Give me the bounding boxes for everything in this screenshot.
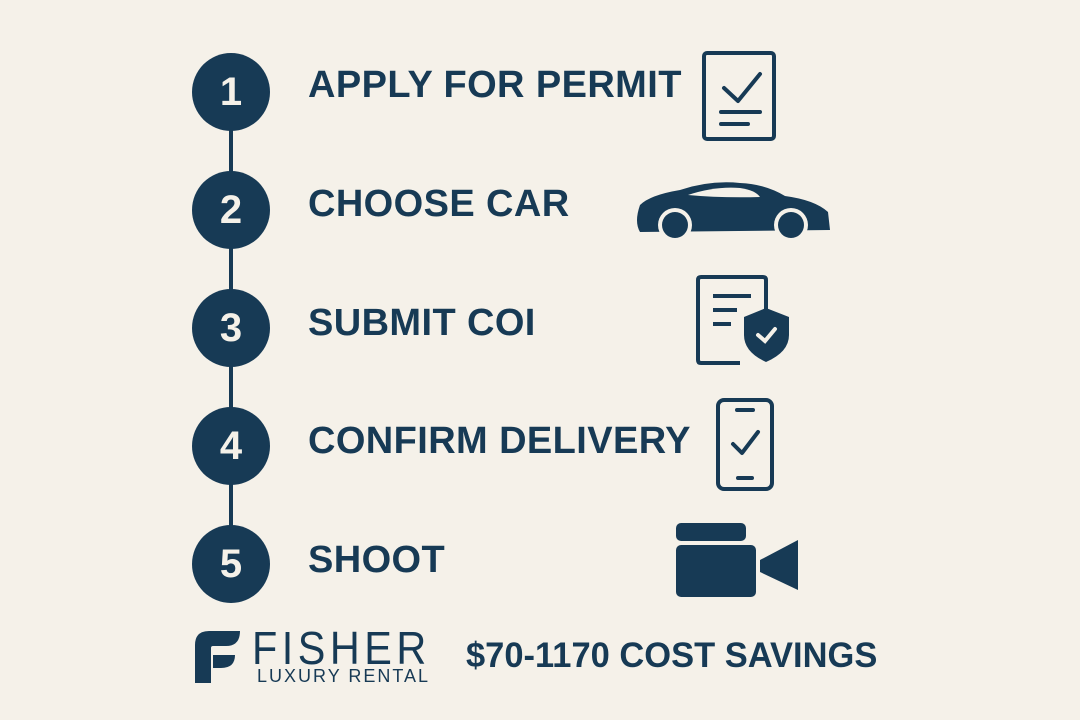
timeline line — [229, 92, 233, 564]
step 3 label: SUBMIT COI — [308, 302, 536, 344]
step 1 number — [192, 53, 270, 131]
step 3 number — [192, 289, 270, 367]
step 4 number — [192, 407, 270, 485]
step 1 number: 1 — [220, 70, 242, 114]
icon: phone with check — [718, 400, 772, 489]
step 5 label: SHOOT — [308, 539, 445, 581]
icon: permit document — [704, 53, 774, 139]
step 1 label: APPLY FOR PERMIT — [308, 64, 682, 106]
brand subtitle: LUXURY RENTAL — [257, 666, 430, 686]
cost savings: $70-1170 COST SAVINGS — [466, 636, 877, 675]
icon: car — [637, 182, 830, 242]
step 5 number: 5 — [220, 542, 242, 586]
step 4 number: 4 — [220, 424, 242, 468]
icon: COI document with shield — [698, 277, 789, 363]
logo mark F — [195, 631, 240, 683]
step 3 number: 3 — [220, 306, 242, 350]
step 4 label: CONFIRM DELIVERY — [308, 420, 691, 462]
step 5 number — [192, 525, 270, 603]
icon: video camera — [676, 523, 798, 597]
step 2 number: 2 — [220, 188, 242, 232]
step 2 label: CHOOSE CAR — [308, 183, 570, 225]
step 2 number — [192, 171, 270, 249]
brand name: FISHER — [252, 622, 431, 674]
